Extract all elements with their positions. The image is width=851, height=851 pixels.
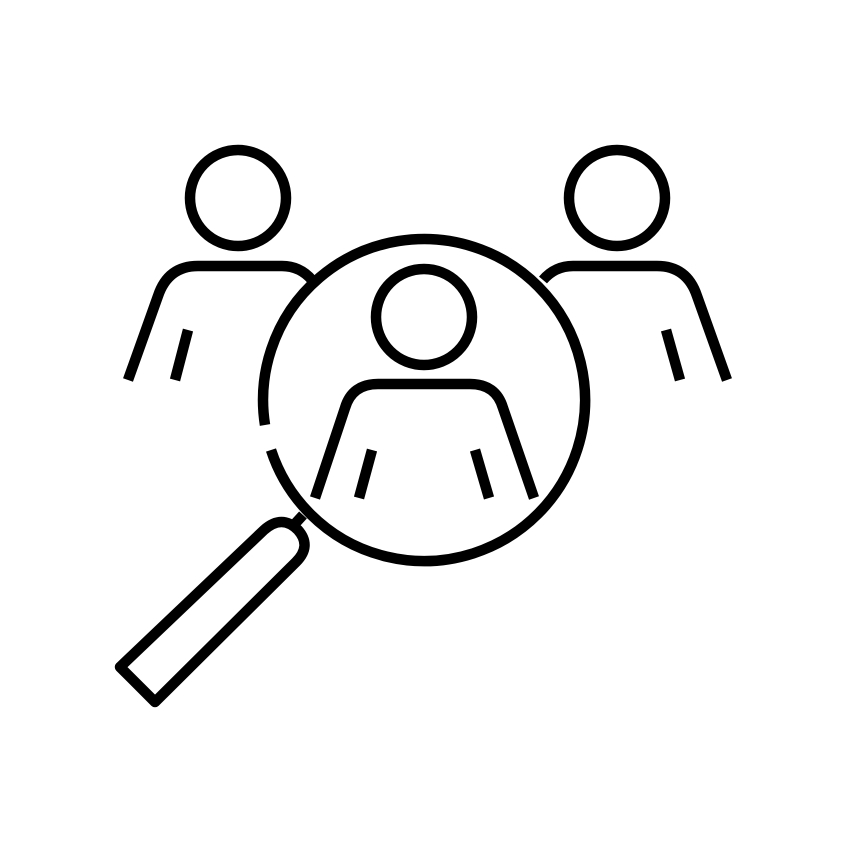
icon: right person	[543, 150, 727, 380]
icon: magnifier handle	[120, 515, 305, 702]
icon: center person	[315, 269, 534, 498]
icon: magnifier lens ring	[263, 239, 585, 561]
icon: left person	[128, 150, 312, 380]
